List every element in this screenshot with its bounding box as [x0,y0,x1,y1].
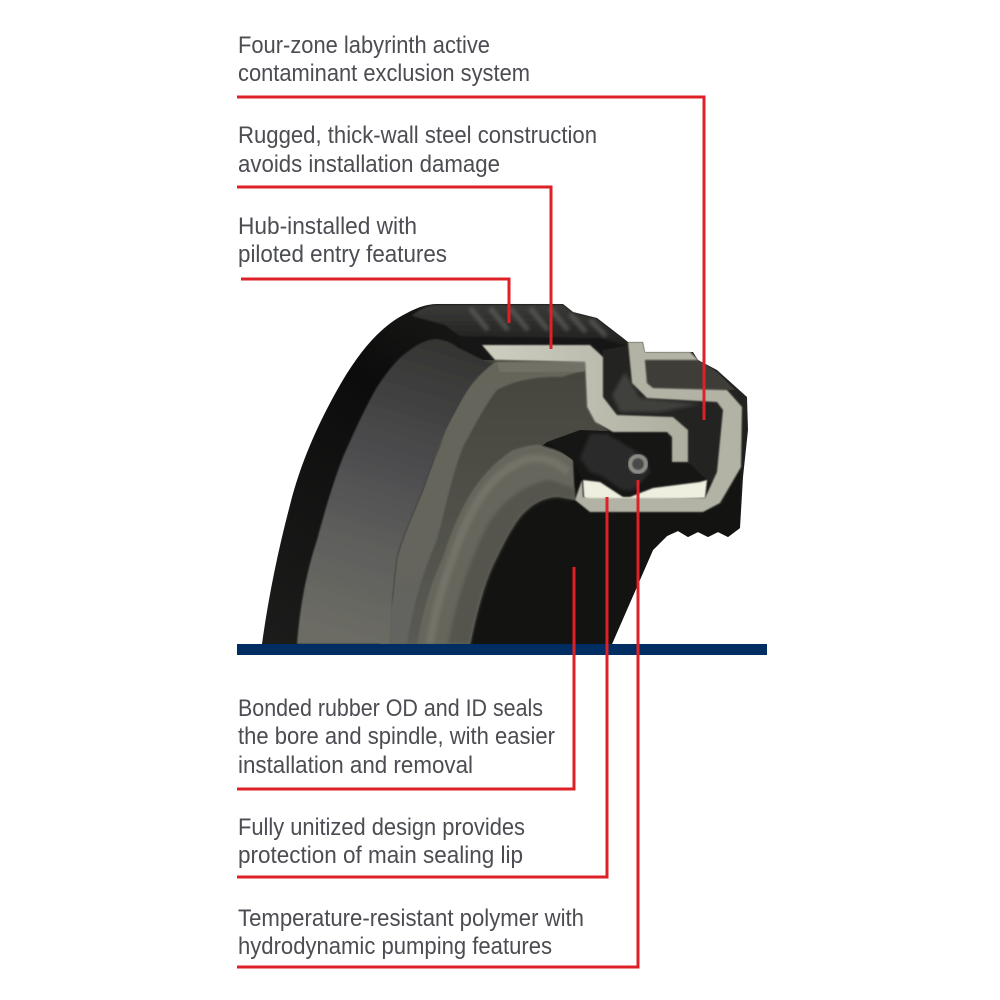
main steel shell [482,345,688,462]
dark strip above steel [455,336,625,392]
text: unitized design [238,814,525,869]
inner ring highlight [430,458,568,644]
garter spring [630,456,646,472]
text: unitized design: protection of main sealing lip [238,842,523,869]
text: polymer [238,905,584,960]
upper cavity shade [645,360,735,390]
leader line: steel construction [237,187,551,349]
outer face [297,339,495,644]
leader line: unitized design [237,497,607,877]
top band with ribbed surface [412,305,625,350]
text: hub-installed: Hub-installed with [238,213,417,240]
temperature-resistant polymer lip [583,480,707,503]
text: hub-installed [238,213,447,268]
text: hub-installed: piloted entry features [238,241,447,268]
outer steel shell [575,342,742,512]
upper inner wall shade [497,362,585,372]
light ring band [390,362,585,644]
text: bonded rubber: Bonded rubber OD and ID seals [238,695,543,722]
text: bonded rubber: installation and removal [238,752,473,779]
lip grey core [580,434,650,490]
text: bonded rubber [238,695,555,779]
leader line: polymer [237,480,638,967]
text: steel construction: avoids installation damage [238,151,500,178]
leader line: labyrinth [237,97,704,420]
text: bonded rubber: the bore and spindle, with easier [238,723,555,750]
bore black interior [470,470,740,644]
text: steel construction [238,122,597,178]
cavity between steel shells [603,345,723,482]
text: steel construction: Rugged, thick-wall steel construction [238,122,597,149]
inner ring darker lower strip [448,480,575,644]
leader line: hub-installed [241,279,509,323]
ribs [470,308,606,336]
leader line: bonded rubber [237,567,574,789]
text: polymer: hydrodynamic pumping features [238,933,552,960]
inner ring band [417,445,575,644]
sealing lip body [547,430,707,497]
text: polymer: Temperature-resistant polymer with [238,905,584,932]
base line bar [237,644,767,655]
outer rubber silhouette [262,304,748,644]
seal cross-section illustration [262,304,748,644]
text: labyrinth system: contaminant exclusion system [238,60,530,87]
text: labyrinth system: Four-zone labyrinth active [238,32,490,59]
text: labyrinth system [238,32,530,87]
text: unitized design: Fully unitized design provides [238,814,525,841]
base of body between face and bore [380,360,610,644]
cavity highlight [612,372,700,412]
